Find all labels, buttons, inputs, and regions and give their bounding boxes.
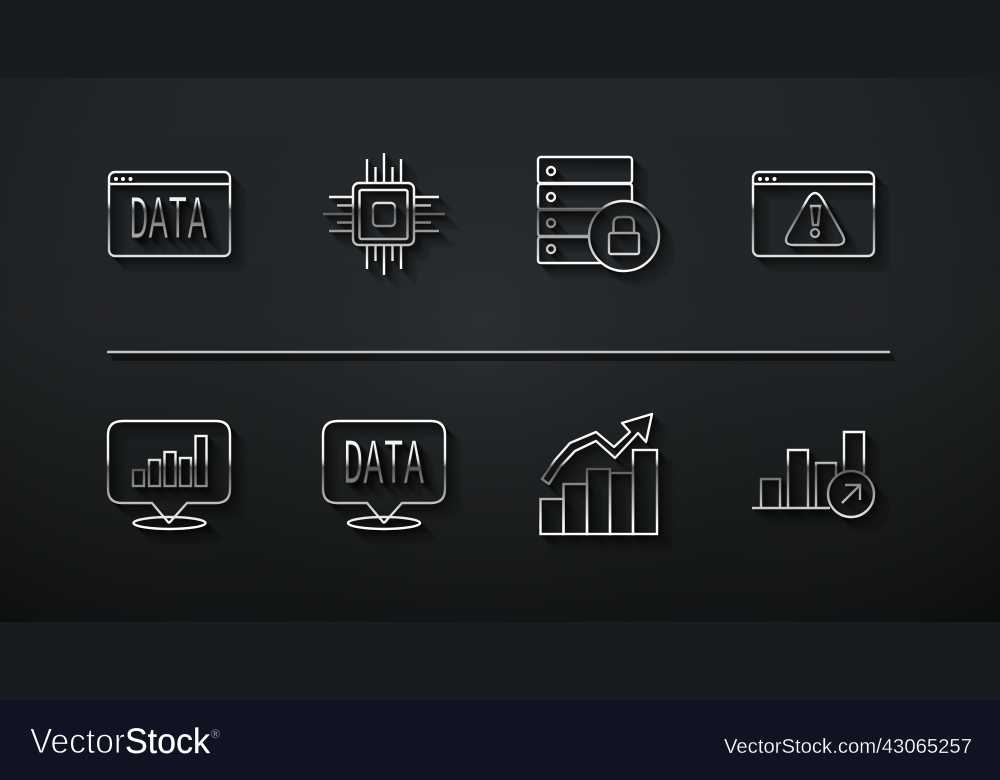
logo: VectorStock: Stock — [125, 722, 210, 761]
icon: browser window with DATA: DATA — [129, 186, 207, 257]
icon: growth bar chart with arrow — [540, 414, 657, 534]
icon: speech bubble with bar chart — [108, 421, 230, 529]
icon: server stack with padlock — [538, 157, 659, 271]
icon: bar chart with arrow badge — [752, 432, 874, 517]
icon: speech bubble with DATA — [323, 421, 445, 529]
background panel — [0, 78, 1000, 622]
icon: browser window with warning — [753, 172, 874, 256]
icon: speech bubble with DATA: DATA — [343, 429, 424, 503]
footer bar — [0, 700, 1000, 780]
logo: VectorStock: Vector — [30, 722, 125, 761]
icon: processor chip — [323, 153, 445, 275]
logo: VectorStock — [30, 722, 220, 761]
logo: VectorStock: ® — [211, 727, 220, 741]
divider line — [107, 352, 896, 361]
icon: browser window with DATA — [109, 172, 230, 257]
image id text: VectorStock.com/43065257 — [724, 736, 972, 758]
